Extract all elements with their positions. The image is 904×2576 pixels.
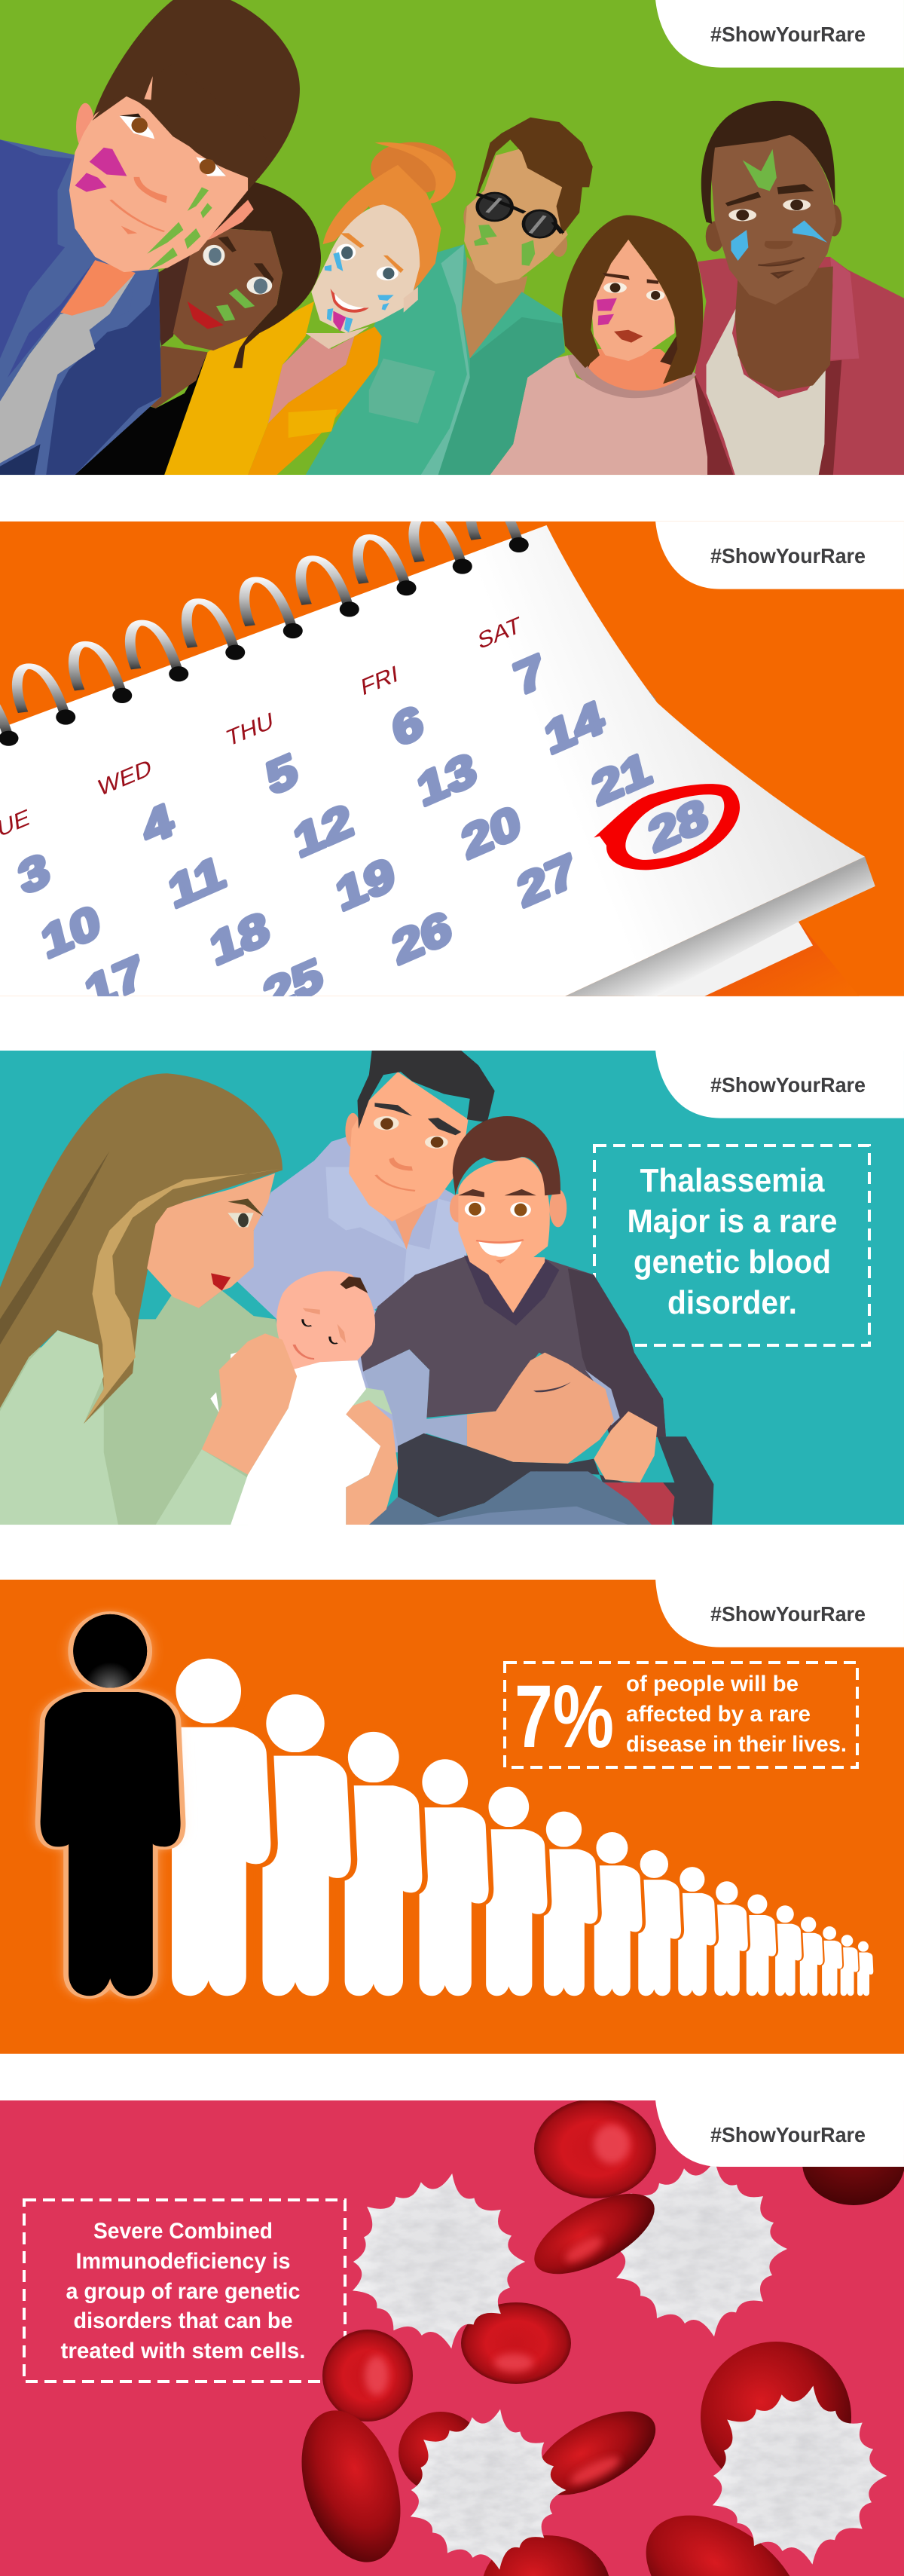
calendar day names and dates: 19 [331,848,399,921]
callout text: a group of rare genetic [66,2279,300,2304]
calendar day names and dates: 5 [262,745,302,805]
person 10 [678,1867,716,1996]
calendar day names and dates: 20 [457,796,525,869]
callout text [627,1162,838,1321]
hashtag label: #ShowYourRare [710,544,866,568]
person 16 [841,1935,858,1996]
callout text [60,2219,306,2363]
statistic text: disease in their lives. [626,1732,847,1757]
hashtag tab [655,522,904,589]
middle sheet [565,857,875,996]
red cushion [603,1482,674,1525]
calendar day names and dates: 12 [289,794,357,867]
calendar day names and dates: 6 [388,696,428,757]
person 7 [544,1812,598,1996]
person: woman with dark skin and black top [75,181,321,475]
person: man in sunglasses and teal shirt [306,118,593,475]
hashtag tab [655,1580,904,1647]
person: red-haired woman in yellow jacket [164,142,456,475]
hashtag tab [655,0,904,68]
statistic text: of people will be [626,1672,799,1696]
family illustration [0,1051,713,1525]
legs [398,1433,713,1525]
white blood cell D [713,2385,887,2565]
red blood cell, long [284,2398,418,2574]
calendar day names and dates: 11 [164,846,230,918]
callout text: Major is a rare [627,1203,838,1240]
clasped hands [467,1353,657,1482]
calendar day names and dates: 28 [644,789,712,862]
calendar day names and dates: 17 [81,946,148,1019]
baby [202,1271,398,1525]
red blood cell, top [534,2099,656,2198]
callout box [24,2200,345,2382]
callout text: treated with stem cells. [60,2339,306,2363]
calendar day names and dates: 14 [540,691,608,764]
callout box [594,1146,869,1345]
jeans [369,1471,652,1525]
white strip below the calendar [0,996,904,1051]
panel: family and thalassemia [0,1051,904,1525]
red blood cell, bottom right [622,2489,824,2576]
callout text: Severe Combined [93,2219,273,2244]
hashtag tab [655,1051,904,1118]
callout text: Thalassemia [640,1162,825,1199]
calendar day names and dates: SAT [477,611,522,654]
person 17 [857,1941,873,1996]
panel background: green [0,0,904,475]
calendar day names and dates: 25 [259,949,327,1022]
panel: group of people [0,0,904,475]
person 9 [638,1850,681,1996]
red blood cell, tilted over cell B [522,2177,667,2290]
hashtag label: #ShowYourRare [710,23,866,46]
person 8 [594,1832,642,1996]
red blood cell, centre right [522,2394,668,2512]
statistic text [626,1672,847,1757]
panel: calendar [0,522,904,996]
calendar day names and dates: 27 [513,844,581,917]
glow behind black person [41,1614,181,1996]
calendar artwork [0,494,904,996]
panel: blood cells and SCID [0,2099,904,2576]
calendar day names and dates: 7 [510,645,550,705]
calendar day names and dates: 18 [206,902,273,975]
calendar day names and dates: THU [225,707,275,752]
red blood cell, under lower white cell [399,2412,483,2493]
hashtag label: #ShowYourRare [710,1602,866,1626]
person: boy in purple sweater [360,1116,666,1446]
calendar day names and dates: WED [97,754,153,801]
panel background: pink [0,2100,904,2576]
person 12 [747,1895,776,1996]
red blood cell, left [322,2330,413,2422]
main calendar page [0,525,865,996]
person 3 [262,1694,351,1996]
red circle around 28 [594,784,740,870]
panel: 7 percent statistic [0,1580,904,2054]
person: father [234,1051,495,1452]
statistic text: affected by a rare [626,1702,811,1727]
red blood cell, large right [701,2342,851,2492]
callout text: genetic blood [634,1244,831,1280]
white blood cell C [411,2409,566,2570]
person: mother [0,1073,300,1525]
person 5 [420,1759,489,1996]
person: man in red shirt [695,101,904,475]
red blood cell, bottom [482,2535,610,2576]
person 15 [822,1926,842,1996]
hashtag label: #ShowYourRare [710,2123,866,2146]
black person [41,1614,181,1996]
person 6 [486,1787,548,1996]
person 13 [775,1905,802,1996]
calendar day names and dates: 21 [588,742,655,815]
lower shaded corner [704,922,859,996]
chin shading [73,1614,147,1688]
white blood cell A [353,2174,525,2348]
7% figure: 7% [515,1667,614,1767]
person: woman in pink top [490,215,707,475]
callout text: disorder. [667,1284,797,1321]
calendar day names and dates: 10 [37,895,105,968]
person: man in blue jacket [0,0,300,475]
hashtag label: #ShowYourRare [710,1073,866,1097]
spiral rings [0,494,529,746]
person 4 [345,1732,422,1996]
callout text: disorders that can be [74,2308,292,2333]
calendar day names and dates: 4 [138,794,178,855]
callout box [505,1663,857,1767]
calendar day names and dates: 3 [14,844,54,904]
person 11 [714,1881,748,1996]
person 14 [800,1917,823,1996]
back sheet [634,922,813,996]
person 2 [172,1659,270,1996]
hashtag tab [655,2100,904,2167]
calendar day names and dates: 26 [388,901,456,974]
panel background: orange [0,522,904,996]
red blood cell, middle [461,2302,571,2384]
calendar day names and dates: 13 [413,743,481,816]
white blood cell B [616,2160,787,2336]
panel background: teal [0,1051,904,1525]
red blood cell, top right [802,2121,904,2205]
callout text: Immunodeficiency is [75,2249,291,2274]
calendar day names and dates [0,611,712,1022]
page edge shadow [547,525,656,699]
panel background: orange [0,1580,904,2054]
row of people pictograms [41,1614,873,1996]
calendar day names and dates: FRI [360,660,399,701]
